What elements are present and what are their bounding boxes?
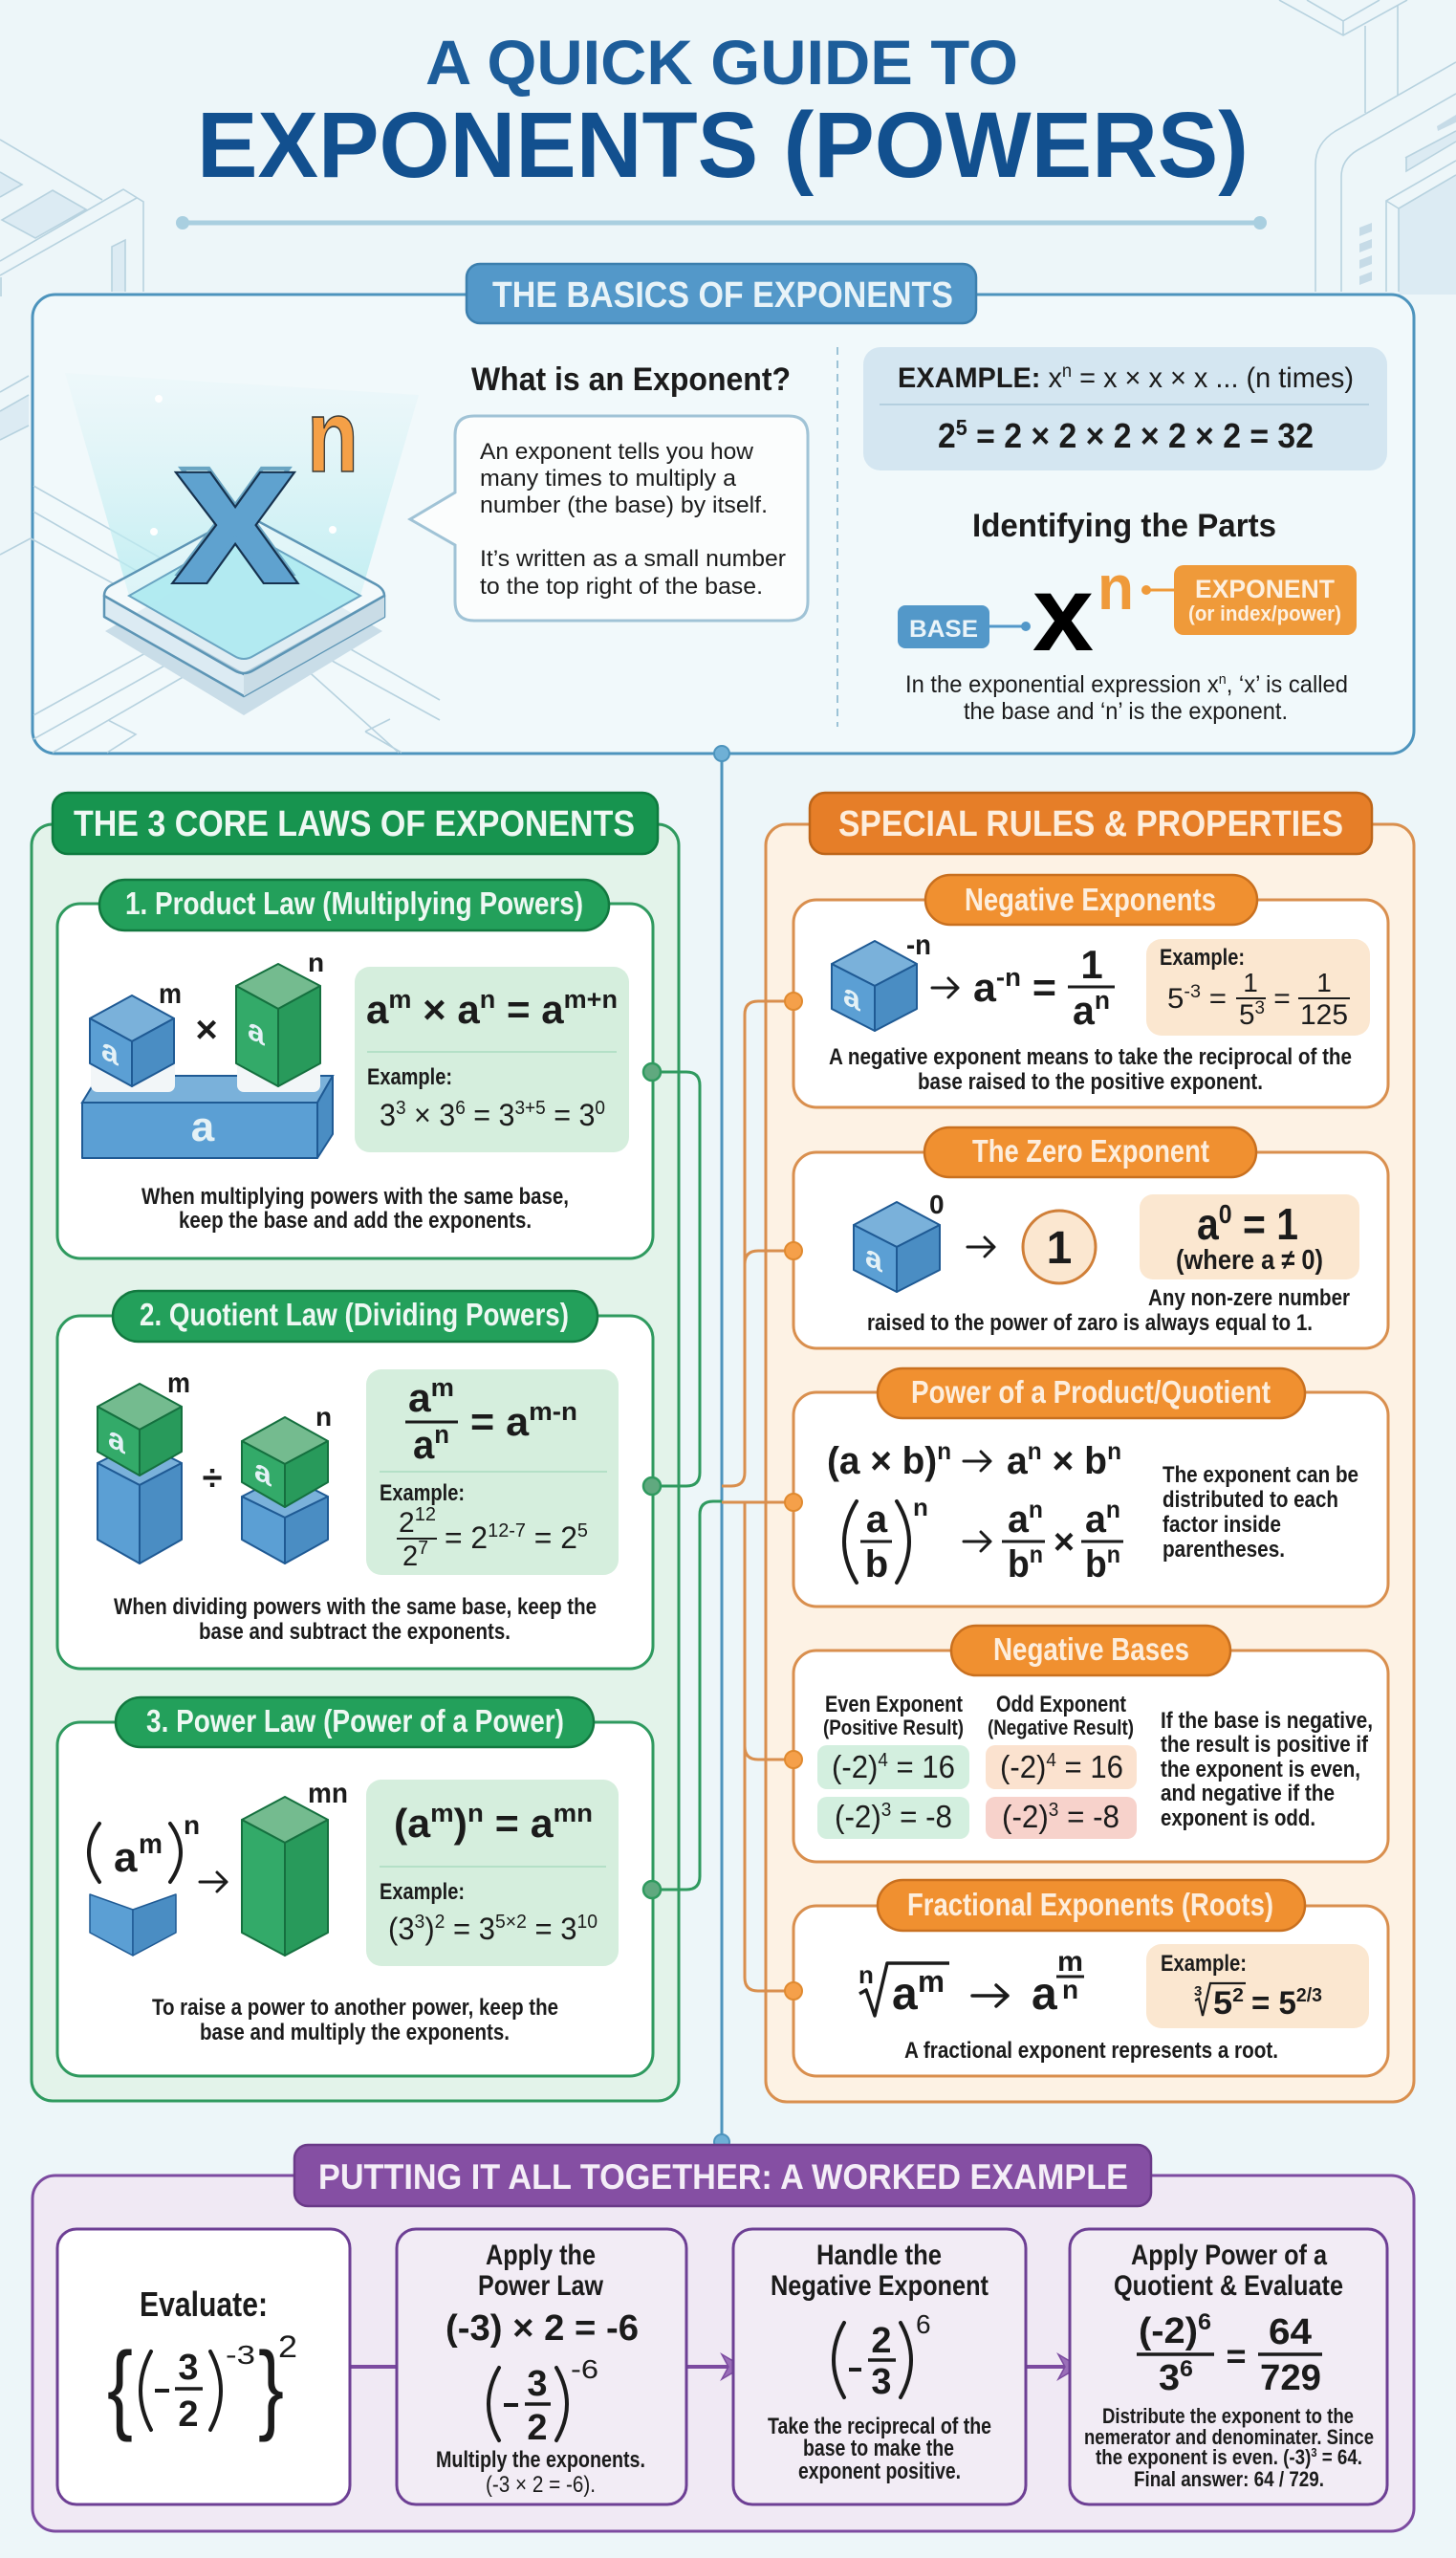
step: evaluate: Evaluate: [140,2285,268,2324]
callout: exponent definition: It’s written as a small number [480,546,786,572]
formula box: quotient law: n [434,1420,449,1449]
text: base and exponent explanation: , ‘x’ is called [1227,671,1348,698]
column: even exponent: 4 [878,1750,888,1771]
heading: special rules: SPECIAL RULES & PROPERTIES [838,804,1343,844]
step: apply power of a quotient and evaluate: Apply Power of a [1131,2240,1327,2271]
step: apply power of a quotient and evaluate: = [1226,2336,1247,2375]
formula: power of a quotient [844,1493,1123,1585]
icon: power of a power blocks: n [184,1810,200,1840]
card: product law [57,880,653,1258]
icon: power of a power blocks [89,1778,348,1956]
card: fractional exponents [793,1880,1388,2076]
formula: root as fractional exponent: m [1057,1946,1083,1978]
heading: worked example: PUTTING IT ALL TOGETHER: A WORKED EXAMPLE [318,2157,1128,2197]
heading: what is an exponent: What is an Exponent? [471,361,791,398]
panel: putting it all together [33,2145,1414,2531]
formula box: zero exponent [1140,1194,1359,1279]
example box: = x × x × x ... (n times) [1072,362,1354,394]
step: apply power of a quotient and evaluate: Quotient & Evaluate [1114,2270,1343,2302]
pill heading: negative bases: Negative Bases [993,1631,1189,1667]
step: handle the negative exponent: Handle the [816,2240,942,2271]
pill heading: negative exponents [925,875,1257,925]
formula box: zero exponent: (where a ≠ 0) [1176,1245,1323,1276]
formula box: quotient law: 12-7 [488,1520,526,1541]
connector: green law nodes [643,1063,722,1898]
example box: negative exponent: -3 [1184,982,1201,1002]
formula: power of a quotient: a [1085,1498,1106,1541]
text: negative exponent rule: base raised to the positive exponent. [918,1069,1263,1095]
formula: root as fractional exponent: n [858,1960,874,1989]
formula box: product law: = 3 [466,1098,514,1132]
text: product law rule [141,1184,569,1234]
heading: the basics of exponents: THE BASICS OF EXPONENTS [492,275,953,316]
pill heading: power law [116,1697,594,1747]
formula box: zero exponent: 0 [1219,1199,1232,1229]
step: apply power of a quotient and evaluate: Distribute the exponent to the [1102,2404,1354,2428]
heading: identifying the parts: Identifying the Parts [972,508,1276,544]
pill heading: the zero exponent [924,1127,1256,1177]
text: base and exponent explanation: In the exponential expression x [905,671,1235,698]
icon: blocks multiplied on a base: a [248,1011,266,1054]
example box: negative exponent: 125 [1300,999,1348,1031]
illustration: x to the n on a platform: X [177,442,293,613]
pill heading: power of a product [878,1368,1305,1418]
formula box: power law: 5×2 [495,1912,527,1933]
example box: negative exponent: 5 [1167,983,1184,1015]
step: handle the negative exponent: Negative Exponent [771,2270,989,2302]
column: odd exponent: (-2) [1000,1749,1049,1784]
formula box: quotient law: a [413,1422,435,1467]
formula: negative exponent: a [1073,988,1095,1033]
pill heading: the zero exponent: The Zero Exponent [972,1133,1209,1169]
example box: negative exponent: = [1201,983,1227,1015]
formula box: power law: m [430,1799,454,1827]
formula box: quotient law: 5 [577,1520,588,1541]
card: the zero exponent [793,1127,1388,1348]
example box: fractional exponent: 5 [1213,1985,1231,2022]
formula: root as fractional exponent: a [1032,1969,1057,2020]
formula box: zero exponent: a [1197,1199,1222,1249]
text: negative exponent rule: A negative exponent means to take the reciprocal of the [829,1044,1352,1070]
step: handle the negative exponent: 3 [871,2362,892,2402]
text: fractional exponent rule: A fractional exponent represents a root. [904,2038,1278,2064]
formula: root as fractional exponent: m [918,1964,945,1999]
step: apply the power law [397,2229,686,2504]
formula: power of a quotient: b [865,1543,888,1585]
formula box: power law: = 3 [445,1912,495,1946]
text: zero exponent rule: Any non-zere number [1148,1285,1350,1311]
formula: root as fractional exponent: n [1062,1975,1078,2004]
formula: negative exponent [973,942,1115,1033]
text: negative base rule: exponent is odd. [1161,1805,1315,1831]
pill heading: fractional exponents [878,1880,1305,1931]
formula: negative exponent: -n [996,963,1021,992]
formula box: quotient law: = 2 [445,1520,488,1555]
formula box: product law: = a [495,987,564,1032]
column: even exponent: (-2) [832,1749,880,1784]
formula box: product law: m [388,985,411,1014]
text: negative exponent rule [829,1044,1352,1095]
formula: power of a quotient: n [1107,1541,1120,1568]
column: odd exponent [986,1692,1137,1839]
pill heading: quotient law: 2. Quotient Law (Dividing Powers) [140,1297,569,1332]
pill heading: negative exponents: Negative Exponents [965,882,1216,917]
formula: power of a quotient: b [1085,1543,1108,1585]
text: negative base rule: and negative if the [1161,1781,1335,1806]
column: even exponent: 3 [881,1800,891,1821]
example box: negative exponent: 5 [1239,999,1255,1031]
text: zero exponent rule: raised to the power of zaro is always equal to 1. [867,1310,1313,1336]
example box: = 2 × 2 × 2 × 2 × 2 = 32 [967,416,1314,455]
diagram: base and exponent parts: (or index/power) [1188,601,1341,625]
icon: cube to the zero equals one: a [865,1237,883,1280]
step: apply power of a quotient and evaluate: 729 [1260,2358,1321,2398]
formula box: product law: 3 [396,1098,406,1119]
callout: exponent definition: to the top right of the base. [480,574,763,600]
formula box: quotient law: 2 [399,1507,415,1539]
example box: fractional exponent: 2/3 [1296,1985,1322,2006]
step: apply power of a quotient and evaluate: 6 [1198,2309,1211,2335]
formula box: product law: m+n [564,985,618,1014]
text: base and exponent explanation [905,671,1348,725]
formula box: product law: 3+5 [514,1098,546,1119]
formula: power of a quotient: a [1008,1498,1029,1541]
column: odd exponent: 4 [1046,1750,1056,1771]
text: product law rule: keep the base and add the exponents. [179,1208,532,1234]
title: A QUICK GUIDE TO [425,27,1018,98]
pill heading: negative bases [951,1626,1230,1675]
formula box: quotient law: = 2 [526,1520,577,1555]
step: handle the negative exponent: exponent positive. [798,2459,961,2484]
formula box: quotient law: = a [470,1399,528,1444]
step: handle the negative exponent: 2 [871,2321,892,2361]
icon: blocks multiplied on a base: m [159,978,182,1010]
formula: power of a quotient: a [866,1498,888,1541]
column: even exponent [817,1692,969,1839]
formula box: product law: = 3 [546,1098,595,1132]
column: odd exponent: (Negative Result) [988,1716,1134,1739]
formula box: quotient law: 2 [402,1541,419,1572]
icon: blocks multiplied on a base [82,948,333,1158]
text: quotient law rule: base and subtract the exponents. [199,1619,511,1645]
formula box: power law: 2 [435,1912,445,1933]
example box: 5 [956,415,967,440]
example box: negative exponent: Example: [1160,945,1245,971]
icon: cube to the minus n [832,929,958,1031]
panel: special rules and properties [766,793,1414,2102]
icon: cube to the minus n: a [843,976,861,1019]
pill heading: power law: 3. Power Law (Power of a Power) [146,1703,564,1738]
example box: fractional exponent: = 5 [1251,1985,1297,2022]
diagram: base and exponent parts [898,552,1357,673]
step: evaluate: 2 [278,2329,297,2364]
step: apply the power law: -6 [571,2354,598,2384]
formula: power of a quotient: × [1054,1522,1075,1563]
callout: exponent definition: An exponent tells you how [480,439,754,465]
formula box: power law: = a [484,1801,554,1846]
icon: cube to the zero equals one: 0 [929,1190,945,1219]
example box: negative exponent: 1 [1316,968,1332,997]
icon: blocks divided [98,1367,332,1563]
example box: n [1062,361,1072,382]
formula box: quotient law: Example: [380,1480,465,1506]
icon: power of a power blocks: mn [308,1778,348,1809]
step: apply power of a quotient and evaluate [1070,2229,1387,2504]
column: odd exponent: 3 [1049,1800,1058,1821]
formula box: product law: 0 [595,1098,605,1119]
formula: root as fractional exponent [858,1946,1084,2020]
column: even exponent: (Positive Result) [823,1716,964,1739]
connector: orange rule nodes [722,993,802,2000]
example box: negative exponent [1146,939,1370,1036]
text: quotient law rule: When dividing powers with the same base, keep the [114,1594,597,1620]
column: even exponent: = 16 [888,1749,955,1784]
step: evaluate: -3 [226,2340,255,2370]
step: apply the power law: Multiply the exponents. [436,2447,645,2473]
diagram: base and exponent parts: EXPONENT [1195,575,1335,603]
formula box: product law: 6 [455,1098,466,1119]
diagram: base and exponent parts: n [1097,552,1134,623]
panel: the basics of exponents [31,264,1414,754]
icon: blocks multiplied on a base: a [191,1104,215,1150]
panel: the 3 core laws of exponents [32,793,679,2101]
step: apply power of a quotient and evaluate: 3 [1311,2445,1317,2460]
step: evaluate [57,2229,350,2504]
text: distribution rule: factor inside [1163,1512,1281,1538]
step: apply the power law: Apply the [486,2240,596,2271]
step: evaluate: 2 [178,2394,199,2435]
formula: power of a quotient: n [913,1493,928,1521]
pill heading: quotient law [113,1291,598,1342]
formula: negative exponent: = [1021,965,1056,1010]
column: odd exponent: Odd Exponent [996,1692,1126,1717]
icon: blocks multiplied on a base: a [101,1031,120,1074]
step: handle the negative exponent: 6 [916,2309,931,2339]
formula box: product law: a [366,987,388,1032]
step: apply power of a quotient and evaluate: = 64. [1317,2445,1362,2469]
formula box: power law: 10 [576,1912,598,1933]
example box: fractional exponent: Example: [1161,1951,1247,1977]
pill heading: product law: 1. Product Law (Multiplying Powers) [125,885,583,921]
illustration: x to the n on a platform: n [307,378,359,493]
formula: root as fractional exponent: a [892,1969,918,2020]
pill heading: fractional exponents: Fractional Exponents (Roots) [907,1887,1273,1922]
formula box: quotient law: 12 [415,1504,436,1525]
example box: fractional exponent: 2 [1232,1985,1244,2006]
card: quotient law [57,1291,653,1669]
text: negative base rule [1161,1708,1373,1831]
text: negative base rule: If the base is negative, [1161,1708,1373,1734]
icon: blocks divided: a [108,1419,126,1462]
text: power law rule: base and multiply the exponents. [200,2020,510,2045]
column: odd exponent: = -8 [1058,1799,1119,1834]
card: negative bases [793,1626,1388,1862]
formula box: quotient law [366,1369,619,1575]
diagram: base and exponent parts: BASE [909,616,978,643]
icon: power of a power blocks: a [114,1834,138,1881]
example box: negative exponent: 3 [1255,998,1265,1018]
column: even exponent: (-2) [835,1799,883,1834]
step: evaluate: } [258,2332,284,2443]
icon: blocks divided: ÷ [203,1458,222,1498]
step: apply power of a quotient and evaluate: (-2) [1139,2311,1195,2351]
formula box: power law: (a [394,1801,429,1846]
step: apply power of a quotient and evaluate: nemerator and denominater. Since [1084,2425,1374,2449]
callout: exponent definition: number (the base) by itself. [480,492,768,518]
card: power of a product or quotient [793,1368,1388,1607]
diagram: base and exponent parts: x [1032,554,1094,673]
column: odd exponent: (-2) [1002,1799,1051,1834]
formula box: product law: Example: [367,1064,452,1090]
text: negative base rule: the exponent is even, [1161,1757,1360,1782]
formula: negative exponent: a [973,965,995,1010]
example box: fractional exponent: 3 [1194,1983,1202,2000]
formula: power of a product: n [1107,1438,1121,1465]
step: apply power of a quotient and evaluate: 6 [1180,2356,1193,2382]
heading: the 3 core laws: THE 3 CORE LAWS OF EXPONENTS [74,804,635,844]
illustration: x to the n on a platform: X [177,442,293,613]
step: apply the power law: (-3 × 2 = -6). [486,2472,596,2498]
callout: exponent definition: many times to multiply a [480,466,737,492]
formula box: power law: ) [424,1912,435,1946]
text: negative base rule: the result is positive if [1161,1732,1369,1758]
text: product law rule: When multiplying powers with the same base, [141,1184,569,1210]
formula box: power law [366,1780,619,1966]
formula box: product law: 3 [380,1098,397,1132]
pill heading: product law [99,880,609,930]
text: quotient law rule [114,1594,597,1645]
formula box: quotient law: 7 [418,1538,428,1559]
formula box: quotient law: a [408,1375,430,1420]
step: handle the negative exponent [733,2229,1026,2504]
icon: cube to the zero equals one [854,1190,1096,1292]
example box [863,347,1387,470]
formula box: power law: = 3 [527,1912,576,1946]
icon: blocks divided: n [315,1402,332,1432]
formula box: product law [355,967,629,1152]
formula box: product law: n [480,985,495,1014]
step: apply power of a quotient and evaluate: 3 [1159,2358,1179,2398]
heading: special rules [810,793,1372,854]
heading: the 3 core laws [53,793,658,854]
step: handle the negative exponent: base to make the [803,2436,954,2461]
formula: power of a quotient: n [1106,1497,1120,1523]
step: apply power of a quotient and evaluate: the exponent is even. (-3) [1096,2445,1348,2469]
text: power law rule [152,1995,558,2045]
example box: 2 [938,416,957,455]
column: even exponent: = -8 [891,1799,952,1834]
step: apply power of a quotient and evaluate: Final answer: 64 / 729. [1134,2467,1324,2491]
text: distribution rule: The exponent can be [1163,1462,1358,1488]
icon: blocks multiplied on a base: × [195,1009,218,1051]
formula box: product law: × a [411,987,480,1032]
icon: cube to the zero equals one: 1 [1047,1223,1072,1274]
formula: power of a quotient: n [1030,1541,1043,1568]
text: zero exponent rule [867,1285,1350,1336]
step: handle the negative exponent: Take the reciprecal of the [768,2414,991,2439]
step: apply the power law: 3 [527,2364,548,2404]
formula: power of a product [827,1438,1121,1482]
formula box: quotient law: m-n [529,1397,577,1426]
step: apply the power law: 2 [527,2408,548,2448]
formula box: power law: mn [554,1799,593,1827]
pill heading: power of a product: Power of a Product/Quotient [911,1374,1271,1410]
formula box: zero exponent: = 1 [1232,1199,1298,1249]
heading: the basics of exponents [467,264,976,323]
formula box: power law: Example: [380,1879,465,1905]
formula box: power law: (3 [388,1912,415,1946]
formula: negative exponent: n [1095,986,1110,1015]
callout: exponent definition [410,416,808,621]
formula box: quotient law: m [431,1373,454,1402]
icon: blocks multiplied on a base: n [308,948,324,977]
formula box: power law: 3 [415,1912,424,1933]
example box: EXAMPLE: x [898,362,1063,394]
step: apply the power law: Power Law [478,2270,604,2302]
card: negative exponents [793,875,1388,1107]
text: distribution rule [1163,1462,1358,1563]
illustration: x to the n on a platform: X [177,435,293,606]
step: apply power of a quotient and evaluate: 64 [1269,2312,1312,2352]
connector: central spine [714,746,729,2150]
text: base and exponent explanation: the base and ‘n’ is the exponent. [964,698,1288,725]
step: evaluate: 3 [178,2348,199,2388]
formula: power of a product: n [937,1438,951,1465]
illustration: x to the n on a platform [65,373,419,715]
formula: power of a product: a [1007,1440,1028,1482]
step: evaluate: { [107,2332,133,2443]
formula: power of a product: × b [1042,1440,1107,1482]
formula: power of a product: n [1028,1438,1042,1465]
example box: negative exponent: = [1273,983,1291,1015]
heading: worked example [294,2145,1151,2206]
icon: blocks divided: m [167,1367,190,1399]
text: distribution rule: parentheses. [1163,1537,1285,1563]
formula: power of a quotient: b [1008,1543,1031,1585]
formula box: power law: n [467,1799,484,1827]
text: distribution rule: distributed to each [1163,1487,1338,1513]
text: base and exponent explanation: n [1219,671,1227,688]
icon: power of a power blocks: m [139,1828,163,1860]
formula: negative exponent: 1 [1080,942,1103,987]
text: power law rule: To raise a power to another power, keep the [152,1995,558,2021]
icon: blocks divided: a [254,1452,272,1495]
formula box: power law: ) [454,1801,467,1846]
formula: power of a quotient: n [1029,1497,1043,1523]
icon: cube to the minus n: -n [906,929,931,961]
step: apply the power law: (-3) × 2 = -6 [445,2308,639,2349]
title: EXPONENTS (POWERS) [197,93,1249,197]
column: odd exponent: = 16 [1056,1749,1123,1784]
example box: fractional exponent [1146,1944,1369,2028]
formula: power of a product: (a × b) [827,1440,941,1482]
example box: negative exponent: 1 [1243,968,1258,997]
card: power law [57,1697,653,2076]
formula box: product law: × 3 [406,1098,455,1132]
column: even exponent: Even Exponent [825,1692,963,1717]
arrows between steps [350,2354,1079,2379]
title [176,27,1267,230]
